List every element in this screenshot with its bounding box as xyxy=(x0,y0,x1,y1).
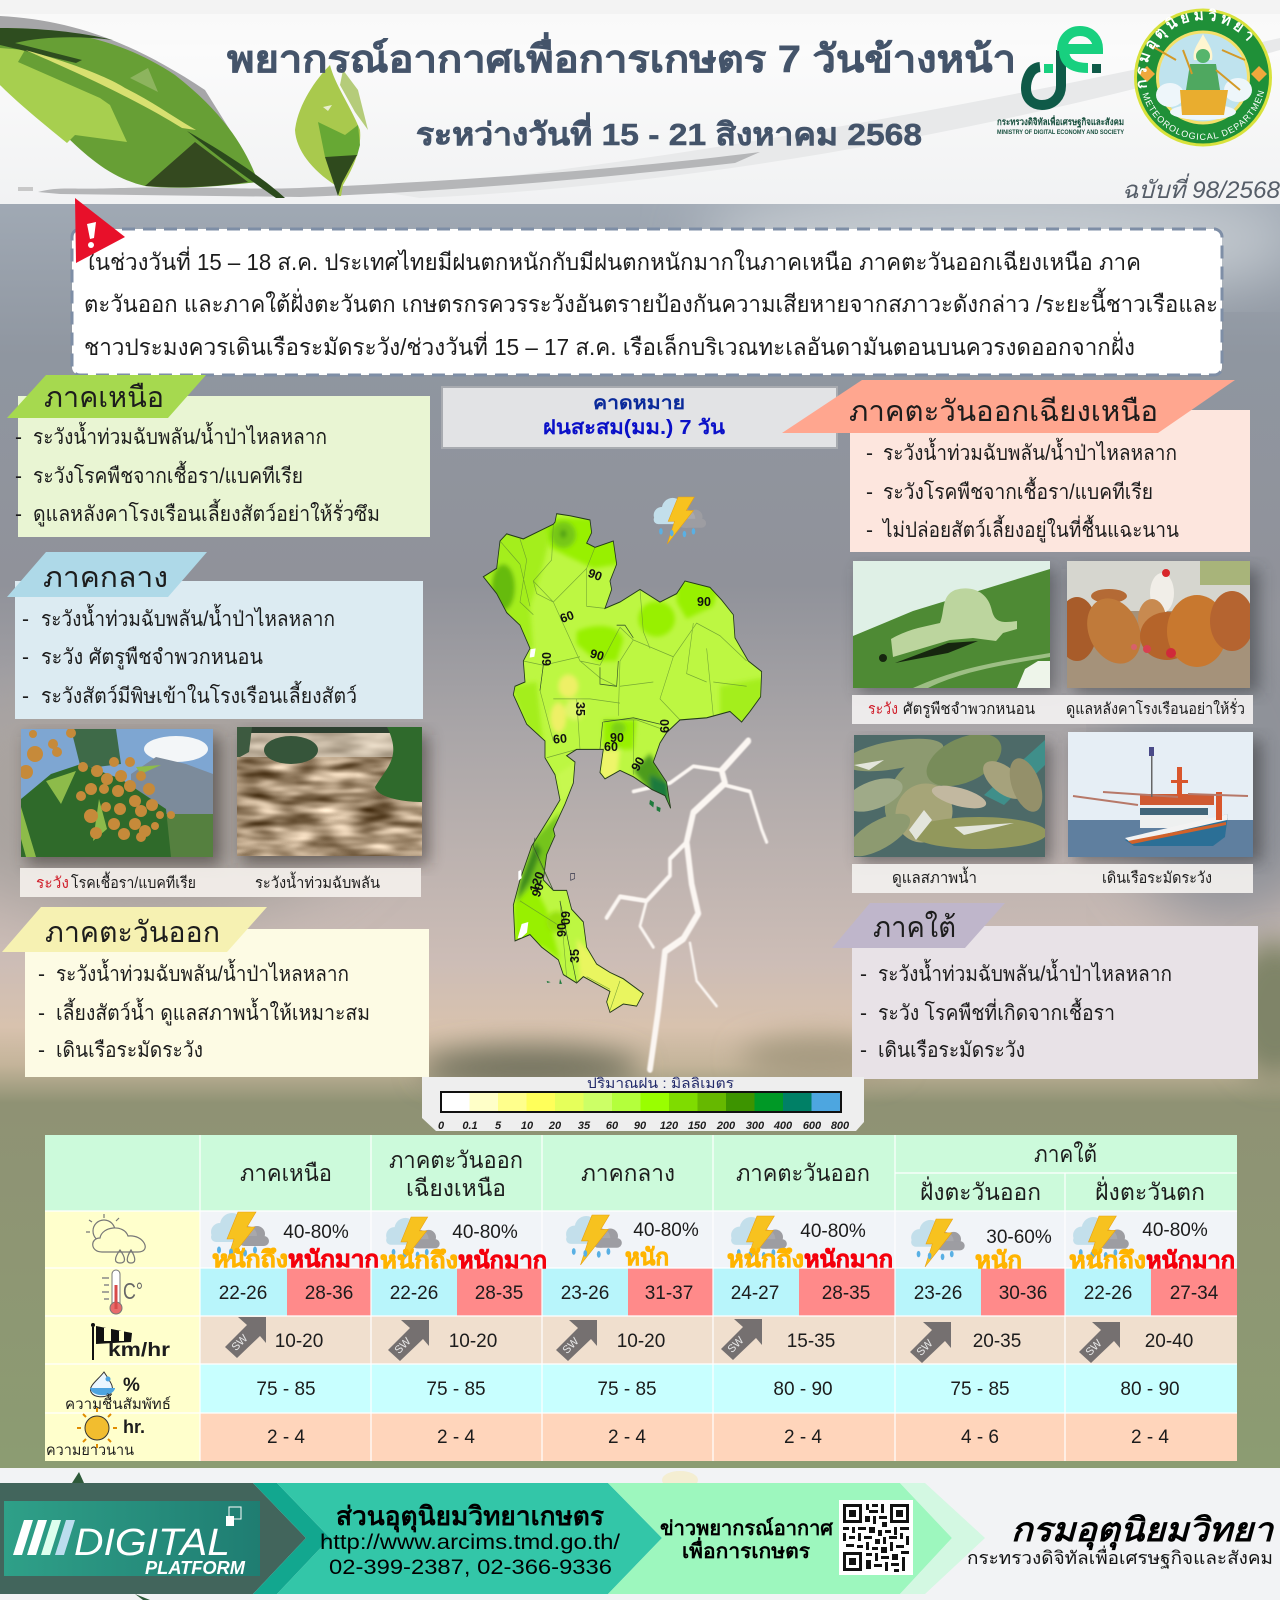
panel: south region: ระวังน้ำท่วมฉับพลัน/น้ำป่าไหลหลาก xyxy=(878,959,1172,986)
footer: department name: กระทรวงดิจิทัลเพื่อเศรษฐกิจและสังคม xyxy=(967,1545,1273,1569)
photo: longan fruit xyxy=(19,728,221,865)
panel: alert text: ในช่วงวันที่ 15 – 18 ส.ค. ประเทศไทยมีฝนตกหนักกับมีฝนตกหนักมากในภาคเหนือ ภาคตะวันออกเฉียงเหนือ ภาค xyxy=(84,246,1141,275)
panel: central region: ระวังน้ำท่วมฉับพลัน/น้ำป่าไหลหลาก xyxy=(41,604,335,631)
logo: meteorological department seal xyxy=(1134,8,1272,146)
photo: catfish xyxy=(841,723,1052,865)
panel: map heading: ฝนสะสม(มม.) 7 วัน xyxy=(543,417,725,439)
panel: south region: - xyxy=(860,1039,867,1062)
panel: north region: - xyxy=(15,426,22,449)
panel: south region: เดินเรือระมัดระวัง xyxy=(878,1039,1025,1062)
table: regional forecast xyxy=(45,1135,1237,1461)
icon: weather row xyxy=(86,1214,145,1263)
map: Thailand rainfall: 60 xyxy=(604,740,618,754)
panel: central region xyxy=(7,552,423,719)
map: Thailand rainfall: 35 xyxy=(568,949,582,963)
wind row values: 10-20 xyxy=(275,1331,323,1352)
icon: wind sock and speed unit: km/hr xyxy=(108,1340,171,1361)
issue number: ฉบับที่ 98/2568 xyxy=(1122,173,1280,204)
legend: rainfall color scale: 200 xyxy=(716,1120,736,1132)
weather row: rain chance and severity: หนักถึง xyxy=(1069,1247,1146,1273)
map: Thailand rainfall: 90 xyxy=(529,881,547,899)
captions: longan and flood photos: ระวัง xyxy=(36,875,69,892)
footer: department name xyxy=(967,1511,1275,1569)
sunshine row values: 2 - 4 xyxy=(267,1427,305,1448)
captions: caterpillar and chicken photos: ศัตรูพืชจำพวกหนอน xyxy=(903,700,1035,719)
legend: rainfall color scale: 800 xyxy=(831,1120,850,1132)
panel: north region: ระวังโรคพืชจากเชื้อรา/แบคทีเรีย xyxy=(33,461,303,488)
weather row: rain chance and severity: หนัก xyxy=(625,1244,669,1270)
legend: rainfall color scale: 600 xyxy=(803,1120,822,1132)
panel: central region: ระวัง ศัตรูพืชจำพวกหนอน xyxy=(41,646,263,670)
legend: rainfall color scale: 90 xyxy=(634,1120,647,1132)
panel: north region: - xyxy=(15,465,22,488)
heading tag: central xyxy=(7,552,207,597)
heading tag: central: ภาคกลาง xyxy=(43,562,168,594)
legend: rainfall color scale: 120 xyxy=(660,1120,679,1132)
panel: east region: - xyxy=(38,963,45,986)
legend: rainfall color scale: 0 xyxy=(438,1120,445,1132)
sunshine row values: 2 - 4 xyxy=(608,1427,646,1448)
panel: north region: - xyxy=(15,503,22,526)
panel: northeast region: ไม่ปล่อยสัตว์เลี้ยงอยู่ในที่ชื้นแฉะนาน xyxy=(881,515,1179,543)
heading tag: north xyxy=(7,375,206,418)
panel: northeast region: ระวังน้ำท่วมฉับพลัน/น้ำป่าไหลหลาก xyxy=(883,438,1177,465)
icon: humidity drop and label: ความชื้นสัมพัทธ์ xyxy=(65,1393,171,1413)
wind row: direction arrows xyxy=(225,1317,1120,1363)
logo: digital ministry xyxy=(997,31,1124,136)
legend: rainfall color scale: 5 xyxy=(495,1120,502,1132)
temperature row values: 28-35 xyxy=(822,1283,870,1304)
heading tag: northeast: ภาคตะวันออกเฉียงเหนือ xyxy=(849,396,1158,428)
wind row values: 10-20 xyxy=(617,1331,665,1352)
icon: humidity drop and label xyxy=(65,1372,171,1413)
panel: east region: เดินเรือระมัดระวัง xyxy=(56,1039,203,1062)
table header labels: ฝั่งตะวันตก xyxy=(1095,1176,1205,1205)
captions: caterpillar and chicken photos: ระวัง xyxy=(868,701,898,718)
panel: northeast region: - xyxy=(866,481,873,504)
footer: agro-meteorology contact: ส่วนอุตุนิยมวิทยาเกษตร xyxy=(336,1501,604,1533)
map: Thailand rainfall: 60 xyxy=(552,731,568,747)
legend: rainfall color scale: 400 xyxy=(773,1120,793,1132)
captions: longan and flood photos xyxy=(20,868,421,897)
photo: fishing boat xyxy=(1068,732,1262,862)
footer: agro-meteorology contact xyxy=(320,1501,620,1579)
panel: central region: - xyxy=(22,685,29,708)
panel: northeast region: ระวังโรคพืชจากเชื้อรา/แบคทีเรีย xyxy=(883,477,1153,504)
panel: northeast region: - xyxy=(866,519,873,542)
icon: sun and duration label: hr. xyxy=(123,1417,145,1437)
sunshine row values: 2 - 4 xyxy=(1131,1427,1169,1448)
icon: sun and duration label: ความยาวนาน xyxy=(46,1443,134,1459)
humidity row values: 80 - 90 xyxy=(1120,1379,1180,1400)
table header labels xyxy=(240,1141,1205,1205)
weather row: rain chance and severity: หนักมาก xyxy=(1146,1247,1235,1273)
wind row: direction arrows: SW xyxy=(229,1332,251,1354)
footer band xyxy=(0,1468,1280,1600)
temperature row values: 23-26 xyxy=(914,1283,962,1304)
wind row: direction arrows: SW xyxy=(392,1335,414,1357)
panel: map heading: คาดหมาย xyxy=(593,393,685,414)
sunshine row values: 2 - 4 xyxy=(784,1427,822,1448)
sunshine row values: 2 - 4 xyxy=(437,1427,475,1448)
footer: news label: เพื่อการเกษตร xyxy=(682,1536,810,1563)
weather row: storm icons xyxy=(211,1212,1129,1267)
legend: rainfall color scale: ปริมาณฝน : มิลลิเมตร xyxy=(587,1075,735,1091)
panel: northeast region: - xyxy=(866,442,873,465)
legend: rainfall color scale: 60 xyxy=(606,1120,619,1132)
captions: fish and boat photos: เดินเรือระมัดระวัง xyxy=(1102,869,1212,887)
logo: meteorological department seal: กรมอุตุนิยมวิทยา xyxy=(1138,8,1252,88)
map: Thailand rainfall: 60 xyxy=(540,652,554,666)
map: Thailand rainfall: 90 xyxy=(610,731,624,745)
weather row: rain chance and severity: หนักมาก xyxy=(288,1246,379,1272)
panel: map heading xyxy=(442,387,837,448)
sunshine row values xyxy=(267,1427,1169,1448)
footer: digital platform badge: DIGITAL xyxy=(74,1522,230,1564)
captions: fish and boat photos: ดูแลสภาพน้ำ xyxy=(892,866,977,888)
captions: longan and flood photos: โรคเชื้อรา/แบคทีเรีย xyxy=(71,871,196,892)
panel: north region xyxy=(7,375,430,537)
legend: rainfall color scale: 10 xyxy=(521,1120,534,1132)
heading tag: east: ภาคตะวันออก xyxy=(45,917,220,949)
panel: north region: ดูแลหลังคาโรงเรือนเลี้ยงสัตว์อย่าให้รั่วซึม xyxy=(33,499,380,527)
panel: central region: ระวังสัตว์มีพิษเข้าในโรงเรือนเลี้ยงสัตว์ xyxy=(41,681,357,708)
captions: caterpillar and chicken photos xyxy=(852,695,1253,724)
weather row: rain chance and severity: 40-80% xyxy=(283,1222,349,1243)
temperature row values: 31-37 xyxy=(645,1283,693,1304)
humidity row values xyxy=(256,1379,1180,1400)
map: Thailand rainfall: 90 xyxy=(628,754,648,774)
panel: northeast region xyxy=(782,380,1250,552)
weather row: rain chance and severity: หนักมาก xyxy=(458,1247,547,1273)
captions: longan and flood photos: ระวังน้ำท่วมฉับพลัน xyxy=(255,871,380,892)
temperature row values: 28-35 xyxy=(475,1283,523,1304)
icon: temperature row xyxy=(102,1270,143,1314)
panel: central region: - xyxy=(22,608,29,631)
footer: digital platform badge: PLATFORM xyxy=(145,1558,246,1578)
heading tag: north: ภาคเหนือ xyxy=(44,382,164,414)
logo: digital ministry: MINISTRY OF DIGITAL ECONOMY AND SOCIETY xyxy=(997,130,1124,136)
map: Thailand rainfall: 90 xyxy=(588,646,606,664)
photo: caterpillar on leaf xyxy=(853,561,1055,693)
header band xyxy=(0,0,1280,204)
panel: east region: - xyxy=(38,1039,45,1062)
wind row: direction arrows: SW xyxy=(914,1337,936,1359)
map: Thailand rainfall: 90 xyxy=(586,566,604,584)
footer: department name: กรมอุตุนิยมวิทยา xyxy=(1011,1511,1275,1551)
panel: east region: ระวังน้ำท่วมฉับพลัน/น้ำป่าไหลหลาก xyxy=(56,959,349,986)
panel: alert text: ตะวันออก และภาคใต้ฝั่งตะวันตก เกษตรกรควรระวังอันตรายป้องกันความเสียหายจากสภาวะดังกล่าว /ระยะนี้ชาวเรือและ xyxy=(84,288,1218,317)
panel: south region: ระวัง โรคพืชที่เกิดจากเชื้อรา xyxy=(878,998,1115,1025)
weather row: rain chance and severity: 40-80% xyxy=(452,1222,518,1243)
photo: chickens xyxy=(1057,561,1259,693)
panel: central region: - xyxy=(22,646,29,669)
legend: rainfall color scale: 20 xyxy=(548,1120,562,1132)
table header labels: ภาคตะวันออก xyxy=(389,1147,523,1173)
panel: north region: ระวังน้ำท่วมฉับพลัน/น้ำป่าไหลหลาก xyxy=(33,422,327,449)
title: พยากรณ์อากาศเพื่อการเกษตร 7 วันข้างหน้า xyxy=(227,32,1016,81)
table header labels: ภาคใต้ xyxy=(1034,1141,1097,1167)
humidity row values: 80 - 90 xyxy=(773,1379,833,1400)
temperature row values xyxy=(219,1283,1219,1304)
temperature row values: 27-34 xyxy=(1170,1283,1219,1304)
weather row: rain chance and severity: หนัก xyxy=(975,1247,1022,1273)
wind row: direction arrows: SW xyxy=(725,1334,747,1356)
legend: rainfall color scale: 0.1 xyxy=(462,1120,478,1132)
icon: wind sock and speed unit xyxy=(91,1323,171,1361)
lightning bolt xyxy=(607,741,767,1069)
legend: rainfall color scale: 300 xyxy=(746,1120,765,1132)
icon: temperature row: C° xyxy=(123,1278,143,1304)
table header labels: เฉียงเหนือ xyxy=(406,1175,506,1201)
temperature row values: 22-26 xyxy=(390,1283,438,1304)
temperature row values: 23-26 xyxy=(561,1283,609,1304)
icon: QR code xyxy=(839,1500,913,1575)
icon: storm cloud over map xyxy=(654,497,706,544)
map: Thailand rainfall: 120 xyxy=(527,870,547,894)
sunshine row values: 4 - 6 xyxy=(961,1427,999,1448)
map: Thailand rainfall xyxy=(480,514,763,1019)
legend: rainfall color scale: 150 xyxy=(688,1120,707,1132)
temperature row values: 30-36 xyxy=(999,1283,1047,1304)
panel: south region: - xyxy=(860,1002,867,1025)
map: Thailand rainfall: 60 xyxy=(658,719,672,733)
map: Thailand rainfall: 60 xyxy=(558,608,576,626)
heading tag: south xyxy=(832,903,1005,948)
weather row: rain chance and severity: หนักถึง xyxy=(727,1246,804,1272)
panel: alert text xyxy=(72,229,1222,375)
icon: large leaf xyxy=(0,16,285,198)
table header labels: ภาคเหนือ xyxy=(240,1160,332,1186)
subtitle: date range: ระหว่างวันที่ 15 - 21 สิงหาคม 2568 xyxy=(416,112,922,152)
wind row: direction arrows: SW xyxy=(1083,1337,1105,1359)
temperature row values: 24-27 xyxy=(731,1283,779,1304)
icon: small leaf xyxy=(295,65,368,196)
weather row: rain chance and severity: 30-60% xyxy=(986,1227,1052,1248)
weather row: rain chance and severity xyxy=(212,1220,1235,1273)
table header labels: ฝั่งตะวันออก xyxy=(920,1176,1041,1205)
footer: digital platform badge xyxy=(4,1501,260,1578)
wind row: direction arrows: SW xyxy=(560,1335,582,1357)
wind row values: 10-20 xyxy=(449,1331,497,1352)
panel: east region xyxy=(2,907,429,1077)
legend: rainfall color scale: 35 xyxy=(578,1120,591,1132)
humidity row values: 75 - 85 xyxy=(950,1379,1010,1400)
panel: south region: - xyxy=(860,963,867,986)
icon: alert triangle xyxy=(75,198,125,263)
table header labels: ภาคกลาง xyxy=(581,1160,675,1186)
footer: news label xyxy=(660,1517,834,1563)
footer: agro-meteorology contact: 02-399-2387, 02-366-9336 xyxy=(329,1556,612,1579)
weather row: rain chance and severity: 40-80% xyxy=(633,1220,699,1241)
map: Thailand rainfall: 60 xyxy=(558,911,572,925)
heading tag: south: ภาคใต้ xyxy=(873,910,956,944)
wind row values: 20-35 xyxy=(973,1331,1021,1352)
temperature row values: 22-26 xyxy=(1084,1283,1132,1304)
map: Thailand rainfall: 90 xyxy=(555,923,569,937)
weather row: rain chance and severity: 40-80% xyxy=(800,1221,866,1242)
logo: digital ministry: กระทรวงดิจิทัลเพื่อเศรษฐกิจและสังคม xyxy=(997,114,1124,128)
icon: sun and duration label xyxy=(46,1408,145,1459)
temperature row values: 22-26 xyxy=(219,1283,267,1304)
weather row: rain chance and severity: หนักมาก xyxy=(804,1246,893,1272)
photo: flash flood xyxy=(237,727,428,863)
icon: humidity drop and label: % xyxy=(123,1375,140,1396)
temperature row values: 28-36 xyxy=(305,1283,353,1304)
table header labels: ภาคตะวันออก xyxy=(736,1160,870,1186)
wind row values xyxy=(275,1331,1193,1352)
humidity row values: 75 - 85 xyxy=(426,1379,486,1400)
panel: east region: เลี้ยงสัตว์น้ำ ดูแลสภาพน้ำให้เหมาะสม xyxy=(56,998,370,1026)
map: Thailand rainfall: 35 xyxy=(573,702,587,716)
wind row values: 15-35 xyxy=(787,1331,835,1352)
footer: news label: ข่าวพยากรณ์อากาศ xyxy=(660,1517,834,1540)
heading tag: northeast xyxy=(782,380,1235,433)
weather row: rain chance and severity: หนักถึง xyxy=(380,1247,458,1273)
weather row: rain chance and severity: หนักถึง xyxy=(212,1246,288,1272)
panel: south region xyxy=(832,903,1258,1079)
panel: alert text: ชาวประมงควรเดินเรือระมัดระวัง/ช่วงวันที่ 15 – 17 ส.ค. เรือเล็กบริเวณทะเลอันดามันตอนบนควรงดออกจากฝั่ง xyxy=(84,331,1135,360)
humidity row values: 75 - 85 xyxy=(597,1379,657,1400)
footer: agro-meteorology contact: http://www.arcims.tmd.go.th/ xyxy=(320,1531,620,1554)
captions: caterpillar and chicken photos: ดูแลหลังคาโรงเรือนอย่าให้รั่ว xyxy=(1066,698,1245,719)
weather row: rain chance and severity: 40-80% xyxy=(1142,1220,1208,1241)
map: Thailand rainfall: 90 xyxy=(697,595,711,609)
legend: rainfall color scale xyxy=(422,1075,864,1132)
captions: fish and boat photos xyxy=(852,864,1253,893)
panel: east region: - xyxy=(38,1002,45,1025)
heading tag: east xyxy=(2,907,267,952)
wind row values: 20-40 xyxy=(1145,1331,1193,1352)
humidity row values: 75 - 85 xyxy=(256,1379,316,1400)
